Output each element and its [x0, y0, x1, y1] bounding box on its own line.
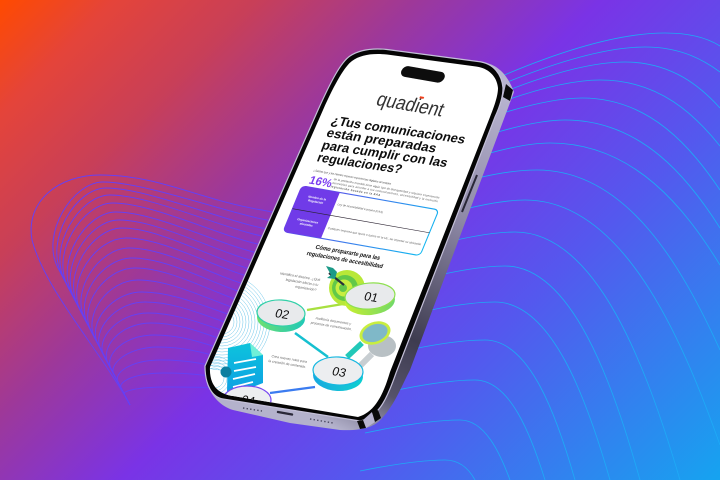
step 3 caption: la creación de contenido.: [268, 359, 307, 369]
intro paragraph: accesibles para acceder a tus comunicaciones, accesibilidad y la inclusión: [332, 181, 439, 203]
title: regulaciones?: [315, 150, 405, 176]
step 3 caption: [268, 355, 307, 368]
stat 16%: 16%: [307, 174, 335, 190]
step 04: 04: [240, 392, 257, 408]
title: están preparadas: [324, 125, 439, 155]
icon: magnifying glass: [347, 317, 396, 366]
step 2 caption: [310, 317, 352, 330]
table labels: afectadas: [299, 222, 314, 228]
table labels: Nombre de la: [308, 195, 327, 202]
wave lines: right shape: [360, 33, 720, 480]
table values: Ley de Accesibilidad Europea (EAA): [337, 202, 384, 214]
step 2 caption: procesos de comunicación.: [310, 321, 352, 331]
step 03: [312, 356, 364, 392]
antenna bands: [357, 84, 513, 429]
intro paragraph: de la población mundial tiene algún tipo de discapacidad y requiere experiencias: [333, 177, 441, 200]
icon: document: [220, 343, 263, 394]
step 03: 03: [330, 364, 348, 380]
section heading: [306, 245, 384, 268]
step 04: [224, 385, 272, 402]
table labels: Organizaciones: [297, 217, 319, 225]
step 1 caption: Identifica el alcance. ¿Qué: [280, 272, 321, 282]
section heading: Cómo prepararte para las: [314, 245, 381, 262]
step 01: [344, 281, 396, 317]
step 02: [256, 299, 306, 333]
intro paragraph: [313, 170, 440, 202]
title: ¿Tus comunicaciones: [329, 113, 468, 147]
notch: [401, 66, 445, 83]
screen content: [210, 66, 465, 402]
step 3 caption: Crea nuevas rutas para: [271, 354, 308, 364]
step 1 caption: [280, 272, 321, 292]
wave lines: left shape: [31, 175, 302, 405]
intro paragraph: legislación basada en la EAA: [330, 184, 381, 197]
intro paragraph: ¿Sabías que y los clientes esperan experiencias digitales accesibles: [313, 168, 393, 186]
step 02: 02: [273, 306, 291, 322]
side button: [462, 175, 477, 212]
icon: target with dart: [326, 266, 365, 306]
phone metal side: [206, 62, 514, 430]
title: para cumplir con las: [320, 137, 450, 170]
table: [283, 186, 439, 256]
step 1 caption: organización?: [295, 285, 317, 292]
connector 02-03: [295, 333, 328, 357]
phone: [174, 49, 514, 430]
bottom speaker and port: [243, 408, 333, 423]
connector 01-02: [307, 304, 343, 310]
step 2 caption: Auditoría documentos y: [315, 316, 352, 326]
table labels: Regulación: [307, 198, 324, 205]
screen background: [210, 54, 498, 417]
logo: quadient: [373, 89, 448, 121]
phone bezel: [205, 49, 503, 421]
step 1 caption: legislación afecta a tu: [285, 278, 319, 287]
table values: [328, 203, 421, 246]
section heading: regulaciones de accesibilidad: [305, 251, 384, 270]
logo: [376, 95, 445, 116]
concentric arcs decoration: [174, 274, 270, 400]
table values: Cualquier empresa que opera o quiera en la UE, sin importar su ubicación: [327, 226, 422, 246]
step 01: 01: [362, 289, 380, 305]
table divider: [292, 209, 429, 233]
table labels: [297, 196, 326, 226]
title: [317, 116, 465, 173]
table purple column: [283, 186, 340, 238]
connector 03-04: [270, 387, 315, 393]
